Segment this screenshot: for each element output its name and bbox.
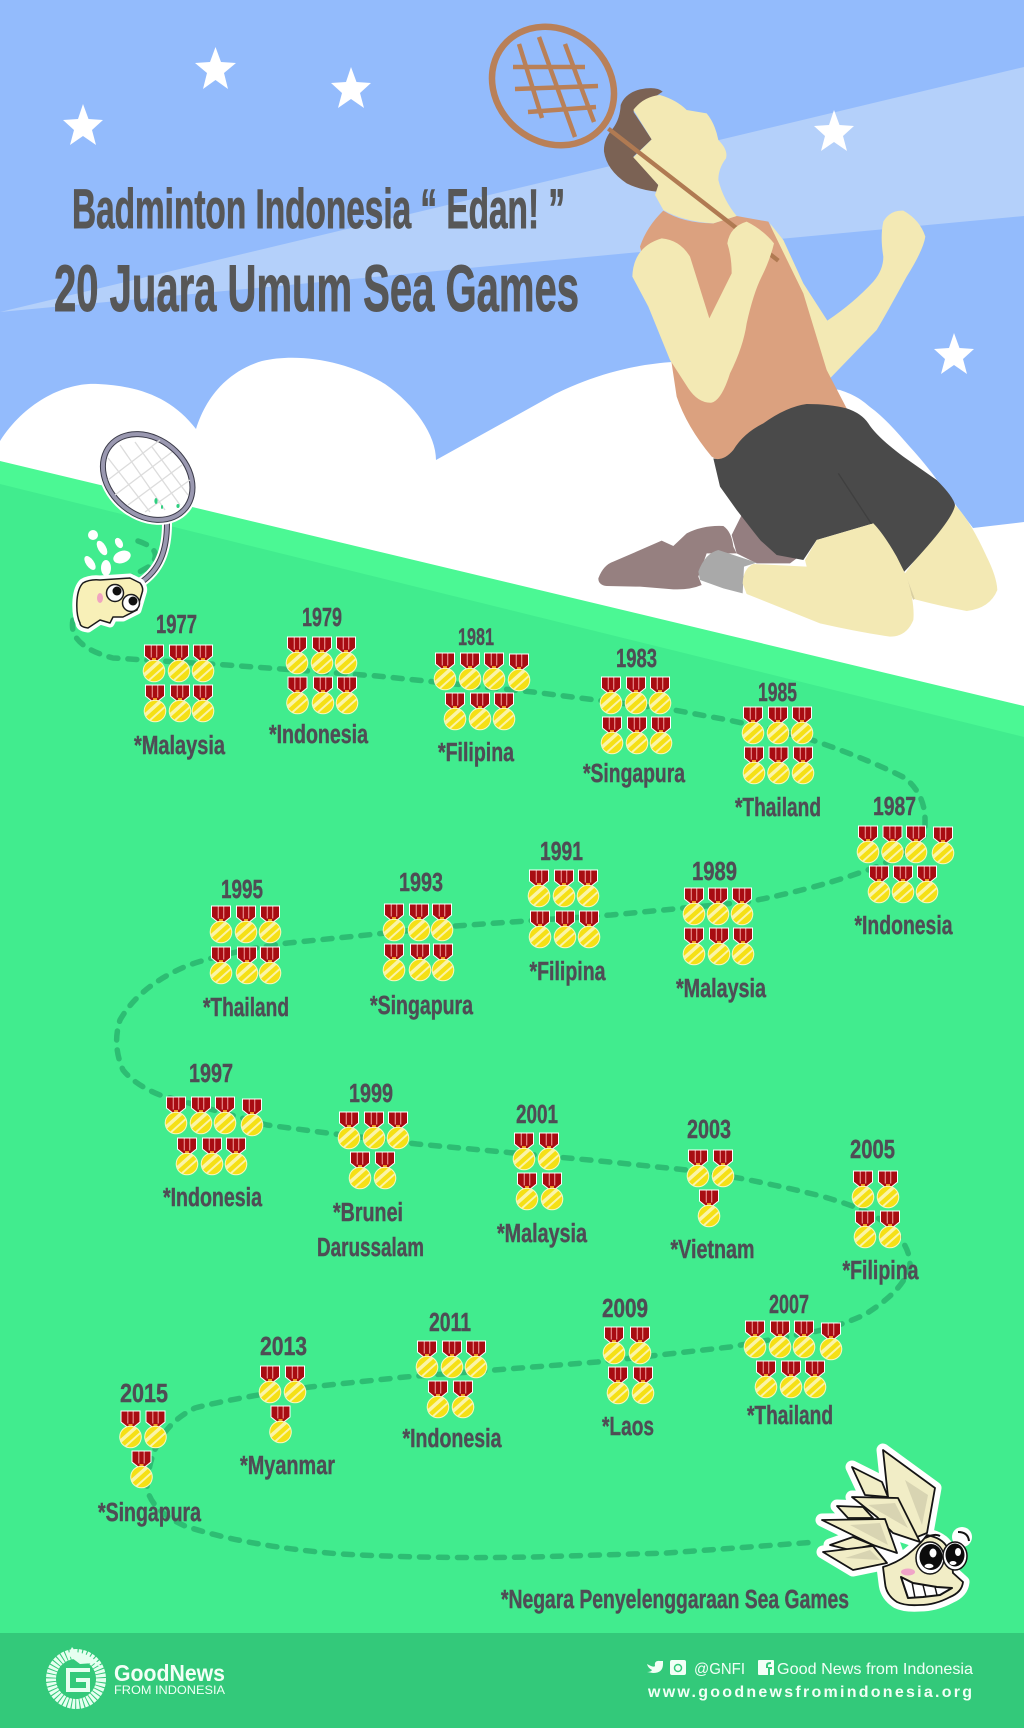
front arm with fist bbox=[632, 222, 774, 403]
blush bbox=[901, 1568, 915, 1576]
clouds bbox=[0, 358, 1024, 760]
curl bbox=[952, 1527, 972, 1547]
group: 2015 Singapura: *Singapura bbox=[98, 1499, 202, 1527]
group: 1981 Filipina: *Filipina bbox=[438, 739, 515, 767]
group: 1987 Indonesia bbox=[854, 791, 955, 940]
logo ring bbox=[51, 1654, 101, 1704]
group: 1993 Singapura bbox=[370, 867, 474, 1020]
group: 1987 Indonesia: *Indonesia bbox=[854, 912, 953, 940]
group: 1997 Indonesia: 1997 bbox=[189, 1058, 233, 1088]
group: 1983 Singapura: *Singapura bbox=[583, 760, 686, 788]
group: 1985 Thailand: *Thailand bbox=[735, 794, 821, 822]
group: 1999 Brunei Darussalam bbox=[317, 1078, 424, 1262]
player upper body bbox=[604, 88, 925, 463]
shorts bbox=[713, 404, 955, 573]
social and web links: www.goodnewsfromindonesia.org bbox=[647, 1684, 972, 1701]
group: 1995 Thailand: 1995 bbox=[221, 874, 263, 904]
group: 1991 Filipina bbox=[527, 836, 606, 986]
title: Badminton Indonesia “ Edan! ” bbox=[72, 177, 565, 240]
group: 1999 Brunei Darussalam: *Brunei bbox=[333, 1199, 403, 1227]
icon: twitter bbox=[647, 1661, 663, 1673]
group: 2011 Indonesia: 2011 bbox=[429, 1307, 471, 1337]
mascot eyes bbox=[106, 584, 124, 602]
group: 1993 Singapura: 1993 bbox=[399, 867, 443, 897]
group: 1989 Malaysia: 1989 bbox=[692, 856, 737, 886]
group: 2001 Malaysia: *Malaysia bbox=[497, 1220, 588, 1248]
social and web links: @GNFI bbox=[694, 1661, 745, 1678]
group: 1987 Indonesia: 1987 bbox=[873, 791, 916, 821]
rear arm bbox=[770, 211, 925, 378]
group: 1989 Malaysia bbox=[676, 856, 767, 1003]
group: 1999 Brunei Darussalam: Darussalam bbox=[317, 1234, 424, 1262]
group: 2007 Thailand bbox=[743, 1289, 843, 1430]
group: 2001 Malaysia bbox=[497, 1099, 588, 1248]
group: 2013 Myanmar: *Myanmar bbox=[240, 1452, 335, 1480]
group: 2013 Myanmar: 2013 bbox=[260, 1331, 307, 1361]
hair bbox=[604, 88, 663, 192]
group: 1993 Singapura: *Singapura bbox=[370, 992, 474, 1020]
group: 1977 Malaysia: 1977 bbox=[156, 609, 197, 639]
main green field bbox=[0, 484, 1024, 1728]
group: 2003 Vietnam: *Vietnam bbox=[670, 1236, 754, 1264]
social and web links: Good News from Indonesia bbox=[777, 1661, 973, 1678]
sock bbox=[698, 550, 757, 593]
face and neck bbox=[633, 95, 737, 223]
footer band bbox=[0, 1633, 1024, 1728]
social and web links bbox=[647, 1660, 973, 1701]
torso singlet bbox=[640, 211, 847, 463]
title: 20 Juara Umum Sea Games bbox=[54, 251, 579, 325]
group: 1985 Thailand bbox=[735, 677, 821, 822]
group: 1999 Brunei Darussalam: 1999 bbox=[349, 1078, 393, 1108]
group: 1995 Thailand: *Thailand bbox=[203, 994, 289, 1022]
logo eagle head bbox=[68, 1647, 102, 1668]
feather shading bbox=[845, 1480, 928, 1560]
racket handle bbox=[608, 129, 778, 261]
front leg bbox=[743, 523, 914, 637]
group: 2013 Myanmar bbox=[240, 1331, 335, 1480]
player lower body bbox=[598, 404, 997, 637]
group: 1991 Filipina: 1991 bbox=[540, 836, 583, 866]
mascot body bbox=[77, 578, 143, 628]
group: 1981 Filipina bbox=[433, 624, 531, 767]
group: 2005 Filipina bbox=[842, 1134, 919, 1285]
group: 1991 Filipina: *Filipina bbox=[530, 958, 606, 986]
group: 2005 Filipina: *Filipina bbox=[842, 1257, 919, 1285]
group: 2003 Vietnam: 2003 bbox=[687, 1114, 731, 1144]
group: 1997 Indonesia bbox=[163, 1058, 264, 1212]
group: 1979 Indonesia: 1979 bbox=[302, 602, 342, 632]
light green slope bbox=[0, 461, 1024, 1728]
legend note: *Negara Penyelenggaraan Sea Games bbox=[501, 1586, 849, 1614]
group: 1977 Malaysia: *Malaysia bbox=[134, 732, 226, 760]
logo: GoodNews from Indonesia: GoodNews bbox=[114, 1660, 225, 1686]
mascot racket bbox=[86, 416, 210, 583]
eyes bbox=[916, 1542, 944, 1574]
group: 1997 Indonesia: *Indonesia bbox=[163, 1184, 263, 1212]
group: 2007 Thailand: *Thailand bbox=[747, 1402, 833, 1430]
group: 2009 Laos bbox=[602, 1293, 655, 1441]
dashed route path bbox=[72, 541, 925, 1558]
group: 2011 Indonesia bbox=[402, 1307, 502, 1453]
group: 2015 Singapura: 2015 bbox=[120, 1378, 168, 1408]
logo: GoodNews from Indonesia bbox=[51, 1647, 225, 1704]
rear shoe bbox=[732, 515, 797, 563]
group: 1989 Malaysia: *Malaysia bbox=[676, 975, 767, 1003]
icon: instagram bbox=[670, 1660, 686, 1675]
illustration: kneeling badminton player bbox=[468, 2, 997, 637]
group: 1979 Indonesia: *Indonesia bbox=[269, 721, 369, 749]
rear leg bbox=[905, 505, 997, 611]
group: 2009 Laos: 2009 bbox=[602, 1293, 648, 1323]
group: 2007 Thailand: 2007 bbox=[769, 1289, 809, 1319]
eyebrow bbox=[925, 1535, 940, 1538]
group: 2001 Malaysia: 2001 bbox=[516, 1099, 558, 1129]
mascot blush bbox=[97, 593, 103, 603]
group: 2015 Singapura bbox=[98, 1378, 202, 1527]
group: 1983 Singapura bbox=[583, 643, 686, 788]
logo inner mark bbox=[68, 1670, 90, 1690]
group: 2009 Laos: *Laos bbox=[602, 1413, 654, 1441]
group: 2011 Indonesia: *Indonesia bbox=[402, 1425, 502, 1453]
logo: GoodNews from Indonesia: FROM INDONESIA bbox=[114, 1685, 225, 1697]
light ray band bbox=[0, 67, 1024, 312]
group: 1979 Indonesia bbox=[269, 602, 369, 749]
group: 2003 Vietnam bbox=[670, 1114, 754, 1264]
stars bbox=[63, 47, 974, 374]
icon: facebook bbox=[758, 1660, 774, 1675]
group: 1995 Thailand bbox=[203, 874, 289, 1022]
flying feathers bbox=[82, 530, 133, 576]
group: 2005 Filipina: 2005 bbox=[850, 1134, 895, 1164]
group: 1981 Filipina: 1981 bbox=[458, 624, 494, 651]
group: 1977 Malaysia bbox=[134, 609, 226, 760]
title bbox=[54, 177, 579, 325]
front shoe bbox=[598, 526, 737, 589]
group: 1983 Singapura: 1983 bbox=[616, 643, 657, 673]
group: 1985 Thailand: 1985 bbox=[758, 677, 797, 707]
racket head bbox=[468, 2, 638, 170]
grin mouth bbox=[901, 1577, 952, 1598]
mascot: shuttlecock holding racket bbox=[77, 416, 210, 628]
mascot: grinning shuttlecock bbox=[822, 1450, 972, 1605]
